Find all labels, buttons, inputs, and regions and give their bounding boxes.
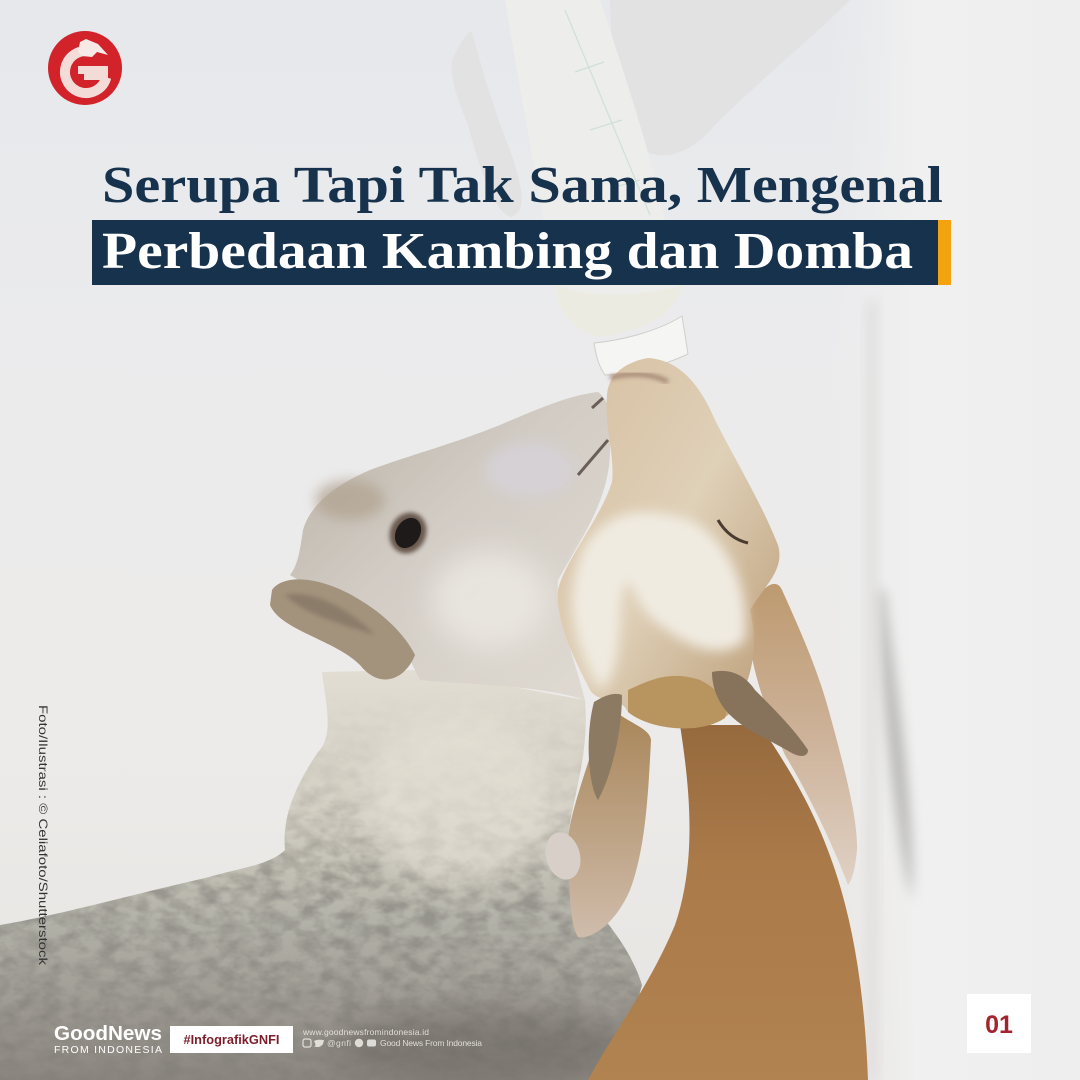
- footer brand: GoodNews from Indonesia: GoodNews: [54, 1023, 162, 1045]
- goat right ear: [748, 584, 857, 885]
- bottle body: [505, 0, 683, 335]
- website and social handles: @gnfi: [327, 1038, 351, 1048]
- hand: [452, 0, 850, 217]
- footer brand: GoodNews from Indonesia: [54, 1023, 162, 1056]
- goat ear tip fold: [540, 828, 586, 884]
- title bar accent: [938, 220, 951, 285]
- goat neck: [588, 725, 868, 1080]
- website and social handles: Good News From Indonesia: [380, 1038, 482, 1048]
- page number: [967, 994, 1031, 1053]
- goat head: [558, 358, 779, 728]
- logo: GNFI red dragon emblem: [48, 31, 122, 105]
- photo: goat kid: [540, 358, 868, 1080]
- goat left horn: [589, 694, 622, 800]
- hashtag label: #InfografikGNFI: [184, 1033, 280, 1047]
- sheep ear: [270, 579, 415, 679]
- title line 2: Perbedaan Kambing dan Domba: [102, 223, 913, 280]
- photo: hand and milk bottle: [452, 0, 850, 375]
- photo: sheep: [0, 392, 650, 1080]
- goat left ear: [567, 710, 651, 937]
- page number: 01: [985, 1011, 1013, 1039]
- photo credit: Foto/Ilustrasi : © Celiafoto/Shutterstock: [36, 705, 50, 966]
- title line 1: Serupa Tapi Tak Sama, Mengenal: [102, 157, 943, 214]
- sheep eye: [383, 506, 433, 560]
- sheep body: [0, 670, 642, 1080]
- footer brand: GoodNews from Indonesia: FROM INDONESIA: [54, 1044, 162, 1056]
- goat closed eye: [718, 520, 748, 543]
- website and social handles: www.goodnewsfromindonesia.id: [302, 1027, 429, 1037]
- title bar: [92, 220, 938, 285]
- goat right horn: [712, 671, 808, 756]
- goat mouth: [610, 374, 668, 382]
- title: [92, 157, 951, 285]
- hashtag label: [170, 1026, 293, 1053]
- sheep head: [290, 392, 611, 700]
- website and social handles: [302, 1027, 482, 1048]
- bottle cap: [594, 316, 688, 375]
